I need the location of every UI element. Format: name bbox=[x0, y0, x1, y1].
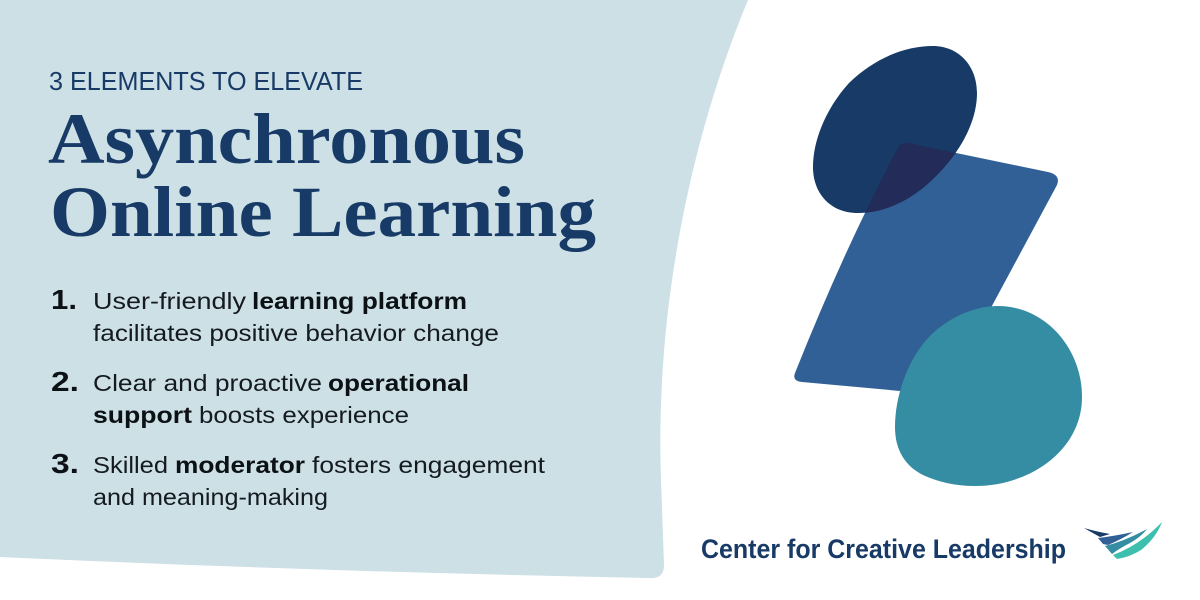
logo bbox=[701, 522, 1162, 564]
title: Online Learning bbox=[50, 172, 596, 252]
icon: logo swooshes bbox=[1084, 522, 1162, 559]
list item 3: moderator bbox=[175, 452, 305, 478]
list item 3: fosters engagement bbox=[312, 452, 546, 478]
eyebrow heading: 3 ELEMENTS TO ELEVATE bbox=[49, 66, 363, 96]
shape: navy oval bbox=[813, 46, 977, 213]
list item 2: operational bbox=[328, 370, 469, 396]
panel: light blue background bbox=[0, 0, 748, 578]
shape: teal blob bbox=[895, 306, 1082, 486]
list item 1: learning platform bbox=[252, 288, 467, 314]
list item 3: Skilled bbox=[93, 452, 168, 478]
title bbox=[48, 99, 596, 252]
list item 1: facilitates positive behavior change bbox=[93, 320, 499, 346]
title: Asynchronous bbox=[48, 99, 525, 179]
list item 1: User-friendly bbox=[93, 288, 247, 314]
list item 1: 1. bbox=[51, 284, 77, 315]
list item 2: boosts experience bbox=[199, 402, 409, 428]
list item 2 bbox=[51, 366, 469, 428]
list item 3: and meaning-making bbox=[93, 484, 328, 510]
shape: blue parallelogram bbox=[794, 143, 1058, 395]
list item 2: 2. bbox=[51, 366, 79, 397]
list item 2: Clear and proactive bbox=[93, 370, 322, 396]
list item 3: 3. bbox=[51, 448, 79, 479]
logo wordmark: Center for Creative Leadership bbox=[701, 534, 1066, 564]
list item 1 bbox=[51, 284, 499, 346]
shape: oval and parallelogram overlap bbox=[865, 143, 956, 213]
list item 3 bbox=[51, 448, 546, 510]
list item 2: support bbox=[93, 402, 192, 428]
